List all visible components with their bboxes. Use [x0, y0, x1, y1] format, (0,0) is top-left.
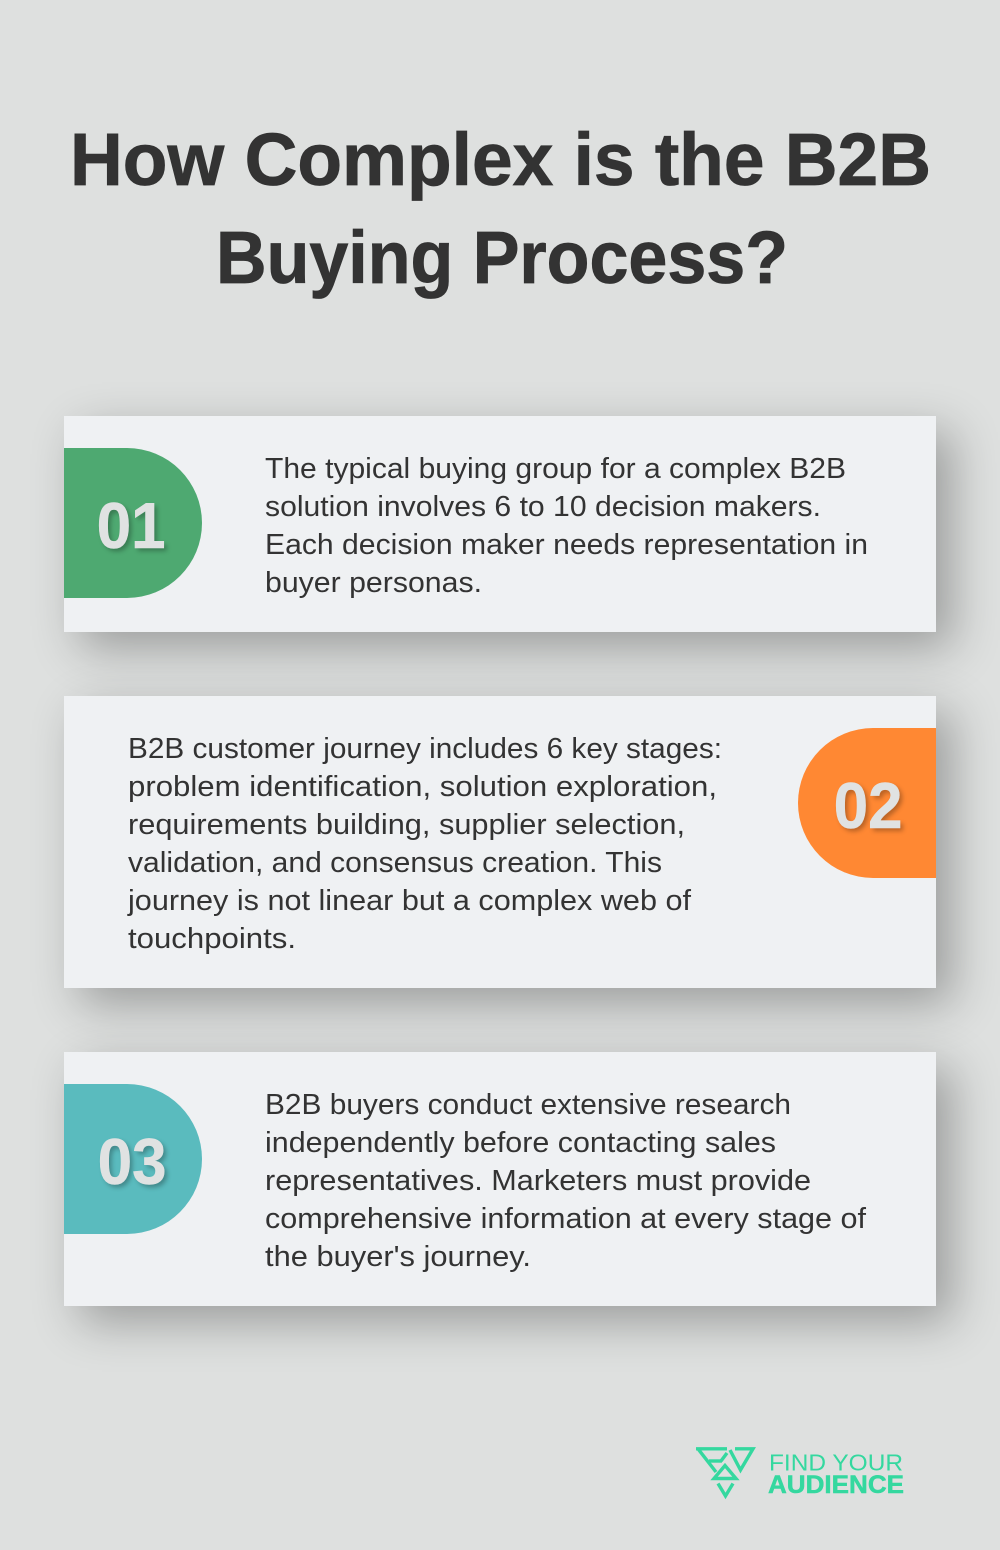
text: card 02 body [127, 733, 722, 955]
logo: Find Your Audience [696, 1447, 904, 1500]
wordmark [768, 1450, 904, 1499]
text: card 03 body: B2B buyers conduct extensive research [265, 1089, 791, 1121]
text: card 02 body: journey is not linear but a complex web of [127, 885, 692, 917]
badge: 01 [64, 448, 202, 598]
title: Buying Process? [216, 216, 788, 299]
wordmark: AUDIENCE [768, 1471, 904, 1499]
text: card 03 body: independently before contacting sales [265, 1127, 776, 1159]
badge: 03 [64, 1084, 202, 1234]
text: card 03 body: comprehensive information at every stage of [265, 1203, 867, 1235]
icon: triangle mark [696, 1449, 753, 1496]
text: card 02 body: problem identification, solution exploration, [128, 771, 717, 803]
text: card 03 body [265, 1089, 867, 1273]
text: card 01 body [265, 453, 868, 599]
text: card 03 body: representatives. Marketers must provide [265, 1165, 811, 1197]
panel: card 03 [64, 1052, 936, 1306]
text: card 02 body: touchpoints. [128, 923, 296, 955]
title [70, 118, 931, 299]
text: card 01 body: buyer personas. [265, 567, 482, 599]
panel: card 02 [64, 696, 936, 988]
text: card 01 body: Each decision maker needs representation in [265, 529, 868, 561]
badge: 02: 02 [834, 769, 902, 842]
title: How Complex is the B2B [70, 118, 931, 201]
wordmark: FIND YOUR [769, 1450, 903, 1476]
panel: card 01 [64, 416, 936, 632]
badge: 01: 01 [97, 489, 165, 562]
text: card 01 body: solution involves 6 to 10 decision makers. [265, 491, 821, 523]
badge: 02 [798, 728, 936, 878]
badge: 03: 03 [98, 1125, 166, 1198]
text: card 02 body: validation, and consensus creation. This [128, 847, 662, 879]
text: card 01 body: The typical buying group for a complex B2B [265, 453, 846, 485]
text: card 02 body: B2B customer journey includes 6 key stages: [128, 733, 722, 765]
text: card 03 body: the buyer's journey. [265, 1241, 531, 1273]
text: card 02 body: requirements building, supplier selection, [128, 809, 685, 841]
